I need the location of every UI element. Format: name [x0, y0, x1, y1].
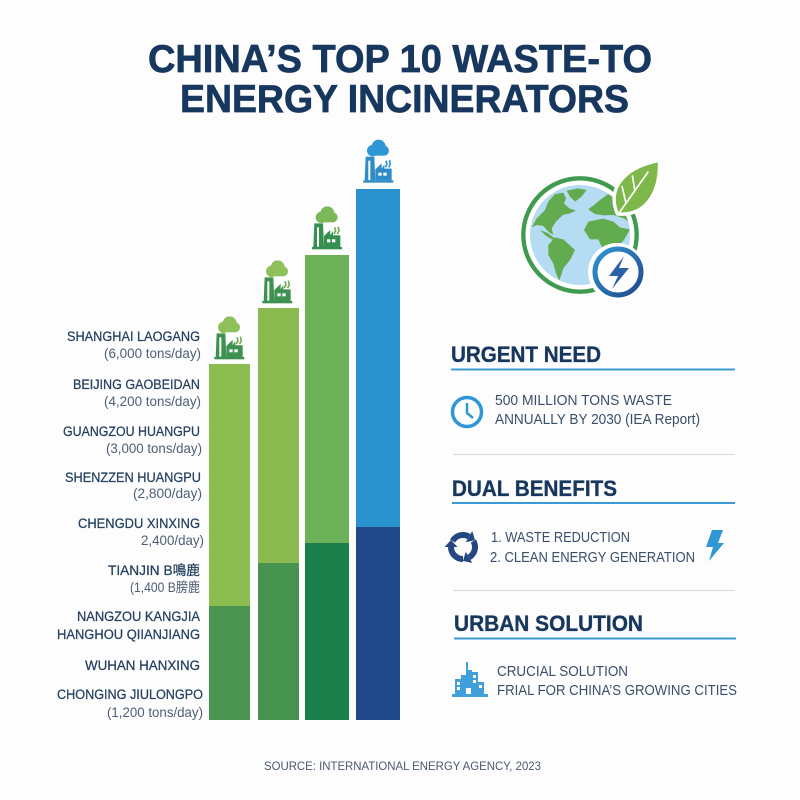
bar 2 — [258, 308, 299, 720]
label: Shanghai Laogang: (6,000 tons/day) — [104, 346, 201, 361]
text: urban solution body: FRIAL FOR CHINA’S GROWING CITIES — [497, 683, 737, 699]
title — [148, 38, 652, 121]
label: Shenzzen Huangpu: SHENZZEN HUANGPU — [65, 470, 201, 485]
icon: leaf — [614, 160, 659, 214]
label: Chonging Jiulongpo: (1,200 tons/day) — [107, 705, 203, 720]
label: Tianjin: (1,400 B膀鹿 — [130, 580, 200, 595]
text: urgent need body: ANNUALLY BY 2030 (IEA Report) — [495, 412, 700, 428]
bar 1 — [209, 364, 250, 720]
label: Chengdu Xinxing: CHENGDU XINXING — [78, 516, 200, 531]
bar chart — [209, 140, 400, 720]
label: Wuhan Hanxing: WUHAN HANXING — [85, 658, 200, 673]
label: Guangzou Huangpu — [63, 424, 202, 456]
label: Chengdu Xinxing: 2,400/day) — [141, 533, 204, 548]
text: urgent need body: 500 MILLION TONS WASTE — [495, 393, 672, 409]
panel: urban solution — [452, 611, 737, 699]
label: Tianjin — [108, 563, 200, 595]
icon: factory bar 2 — [262, 260, 292, 303]
panel: dual benefits — [443, 476, 735, 566]
label: Shenzzen Huangpu: (2,800/day) — [133, 486, 202, 501]
label: Chonging Jiulongpo — [57, 687, 203, 720]
label: Beijing Gaobeidan: BEIJING GAOBEIDAN — [73, 377, 200, 392]
label: Beijing Gaobeidan — [73, 377, 201, 409]
icon: factory bar 3 — [312, 206, 342, 249]
icon: clock — [452, 398, 482, 426]
icon: globe with continents — [523, 178, 637, 292]
source: SOURCE: INTERNATIONAL ENERGY AGENCY, 2023 — [264, 759, 541, 773]
bar 4 — [356, 189, 400, 720]
text: dual benefits body: 2. CLEAN ENERGY GENERATION — [490, 550, 695, 566]
icon: city — [452, 662, 488, 697]
icon: energy badge — [588, 243, 646, 301]
text: dual benefits body: 1. WASTE REDUCTION — [491, 530, 630, 546]
heading: urgent need: URGENT NEED — [451, 342, 601, 367]
chart labels — [57, 329, 204, 720]
label: Nangzou Kangjia and Hanghou Qiianjiang: NANGZOU KANGJIA — [77, 609, 200, 624]
bar 3 — [305, 255, 349, 720]
label: Chengdu Xinxing — [78, 516, 204, 548]
icon: factory bar 4 — [363, 140, 393, 183]
title: CHINA’S TOP 10 WASTE-TO — [148, 38, 652, 81]
text: urgent need body — [495, 393, 700, 428]
label: Guangzou Huangpu: GUANGZOU HUANGPU — [63, 424, 200, 439]
label: Tianjin: TIANJIN B鳴鹿 — [108, 563, 200, 578]
label: Guangzou Huangpu: (3,000 tons/day) — [106, 441, 202, 456]
text: dual benefits body — [490, 530, 695, 566]
label: Chonging Jiulongpo: CHONGING JIULONGPO — [57, 687, 203, 702]
heading: urban solution: URBAN SOLUTION — [454, 611, 643, 636]
text: urban solution body — [497, 664, 737, 699]
icon: factory bar 1 — [214, 316, 244, 359]
label: Nangzou Kangjia and Hanghou Qiianjiang — [57, 609, 200, 642]
heading: dual benefits: DUAL BENEFITS — [452, 476, 617, 501]
panel: urgent need — [451, 342, 735, 428]
label: Shanghai Laogang — [67, 329, 201, 361]
title: ENERGY INCINERATORS — [180, 78, 629, 121]
label: Beijing Gaobeidan: (4,200 tons/day) — [104, 394, 201, 409]
icon: lightning bolt — [706, 530, 724, 561]
label: Nangzou Kangjia and Hanghou Qiianjiang: HANGHOU QIIANJIANG — [57, 627, 200, 642]
text: urban solution body: CRUCIAL SOLUTION — [497, 664, 628, 680]
label: Shanghai Laogang: SHANGHAI LAOGANG — [67, 329, 200, 344]
icon: recycle — [443, 531, 482, 565]
label: Shenzzen Huangpu — [65, 470, 202, 501]
